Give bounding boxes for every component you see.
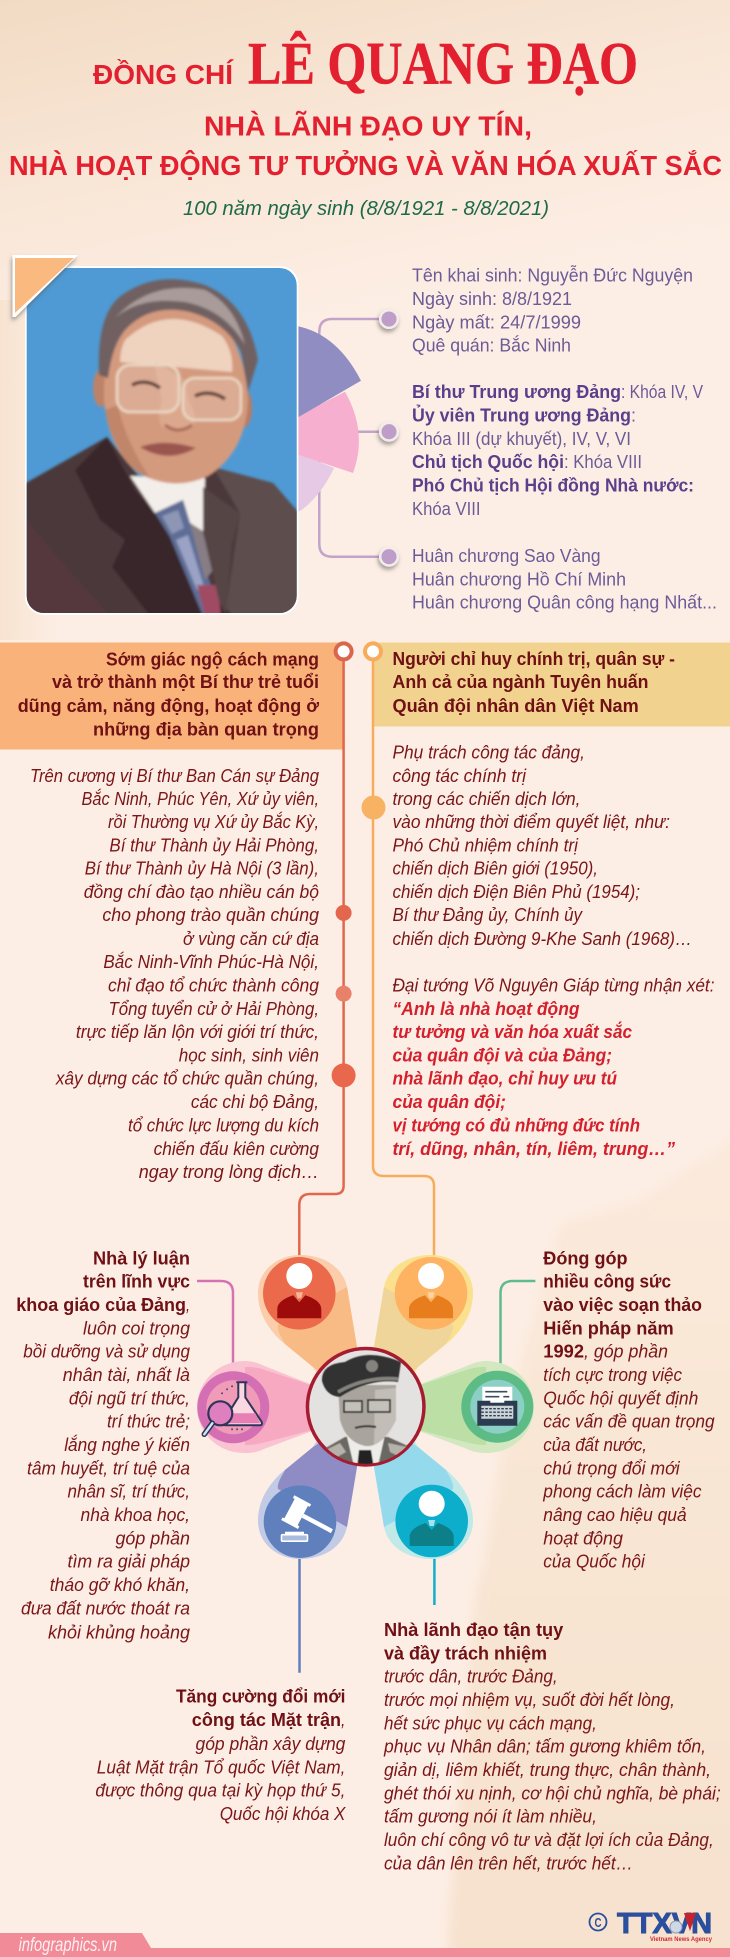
text: dedicated leader: phục vụ Nhân dân; tấm gương khiêm tốn, — [383, 1736, 706, 1757]
top ring — [365, 643, 381, 659]
positions held: Khóa VIII — [412, 498, 480, 519]
text: science and education — [16, 1247, 191, 1642]
personal details: Quê quán: Bắc Ninh — [412, 334, 571, 356]
quotation: của quân đội và của Đảng; — [392, 1044, 612, 1065]
body text: right: Đại tướng Võ Nguyên Giáp từng nhận xét: — [392, 974, 714, 995]
quotation: của quân đội; — [392, 1091, 506, 1112]
agency subtitle: Vietnam News Agency — [650, 1936, 713, 1943]
heading: left — [18, 649, 320, 739]
personal details: Tên khai sinh: Nguyễn Đức Nguyện — [412, 265, 693, 286]
decorations: Huân chương Hồ Chí Minh — [412, 568, 626, 589]
body text: right: trong các chiến dịch lớn, — [392, 788, 580, 809]
positions held: Chủ tịch Quốc hội — [412, 451, 564, 472]
body text: right: vào những thời điểm quyết liệt, như: — [392, 811, 670, 832]
text: dedicated leader: trước dân, trước Đảng, — [384, 1666, 558, 1687]
text: constitution: nâng cao hiệu quả — [543, 1504, 687, 1525]
text: front work: , — [341, 1709, 345, 1730]
body text: left: chiến đấu kiên cường — [154, 1138, 320, 1159]
portrait photo — [12, 255, 299, 616]
body text: left: Bí thư Thành ủy Hà Nội (3 lần), — [85, 858, 319, 879]
text: science and education: nhân sĩ, trí thức, — [68, 1481, 190, 1502]
text: dedicated leader — [383, 1619, 721, 1873]
center portrait — [306, 1347, 426, 1470]
text: dedicated leader: hết sức phục vụ cách mạng, — [384, 1712, 597, 1733]
timeline: right — [362, 643, 434, 1260]
body text: left: Bí thư Thành ủy Hải Phòng, — [109, 834, 319, 855]
text: science and education: khoa giáo của Đảng — [16, 1294, 186, 1315]
quotation: nhà lãnh đạo, chỉ huy ưu tú — [392, 1068, 617, 1089]
text: constitution: tích cực trong việc — [543, 1364, 683, 1385]
petal: bottom right — [366, 1414, 473, 1559]
connector dots — [380, 310, 398, 566]
text: science and education: lắng nghe ý kiến — [64, 1434, 190, 1455]
logo: TTXVN — [590, 1908, 713, 1943]
petal: left — [197, 1361, 320, 1453]
connector: green — [500, 1281, 535, 1372]
text: front work: được thông qua tại kỳ họp thứ 5, — [95, 1780, 345, 1801]
subtitle line 1: NHÀ LÃNH ĐẠO UY TÍN, — [204, 110, 532, 142]
body text: right: chiến dịch Biên giới (1950), — [392, 858, 598, 879]
text: constitution: các vấn đề quan trọng — [543, 1411, 715, 1432]
text: front work: Luật Mặt trận Tổ quốc Việt Nam, — [97, 1756, 345, 1777]
text: constitution: , góp phần — [584, 1341, 668, 1362]
text: front work: Quốc hội khóa X — [220, 1803, 346, 1824]
text: front work: công tác Mặt trận — [192, 1709, 341, 1730]
heading: left: dũng cảm, năng động, hoạt động ở — [18, 695, 320, 716]
connector lines: biography — [319, 319, 389, 557]
text: science and education: góp phần — [116, 1527, 190, 1548]
positions held: : — [631, 404, 636, 425]
timeline dot 1 — [336, 905, 352, 921]
heading: right: Anh cả của ngành Tuyên huấn — [392, 671, 648, 692]
positions held: Phó Chủ tịch Hội đồng Nhà nước: — [412, 474, 694, 496]
petal: top left — [258, 1255, 365, 1400]
connector: blue — [298, 1555, 301, 1673]
body text: left: xây dựng các tổ chức quần chúng, — [55, 1068, 319, 1089]
text: science and education: bồi dưỡng và sử dụng — [23, 1341, 191, 1362]
body text: left: cho phong trào quần chúng — [102, 904, 320, 925]
text: dedicated leader: tấm gương nói ít làm nhiều, — [384, 1806, 597, 1827]
positions held — [412, 381, 704, 519]
decorations — [412, 545, 717, 613]
personal details: Ngày sinh: 8/8/1921 — [412, 288, 572, 309]
copyright mark: C — [594, 1915, 602, 1930]
right column — [392, 648, 714, 1159]
body text: left — [30, 765, 320, 1182]
body text: right: Phó Chủ nhiệm chính trị — [392, 834, 579, 855]
text: constitution: của Quốc hội — [543, 1551, 646, 1572]
text: constitution: Quốc hội quyết định — [543, 1387, 698, 1408]
heading: left: những địa bàn quan trọng — [93, 718, 319, 739]
personal details — [412, 265, 693, 356]
text: science and education: Nhà lý luận — [93, 1247, 190, 1268]
text: science and education: tìm ra giải pháp — [68, 1551, 190, 1572]
body text: left: Bắc Ninh-Vĩnh Phúc-Hà Nội, — [103, 951, 319, 972]
name: LÊ QUANG ĐẠO — [248, 30, 638, 96]
text: constitution: chú trọng đổi mới — [543, 1457, 681, 1478]
corner triangle — [12, 255, 78, 317]
petal: pink — [290, 392, 359, 473]
text: science and education: đội ngũ trí thức, — [69, 1387, 190, 1408]
body text: left: Bắc Ninh, Phúc Yên, Xứ ủy viên, — [82, 788, 319, 809]
positions held: Bí thư Trung ương Đảng — [412, 381, 621, 402]
icon: typewriter — [461, 1371, 533, 1443]
icon: person, teal — [395, 1485, 468, 1557]
text: constitution — [542, 1247, 715, 1572]
petal: purple — [290, 325, 361, 422]
text: science and education: trên lĩnh vực — [83, 1271, 190, 1292]
quotation: “Anh là nhà hoạt động — [392, 998, 580, 1019]
body text: left: Tổng tuyển cử ở Hải Phòng, — [108, 998, 319, 1019]
body text: right: Phụ trách công tác đảng, — [392, 742, 585, 763]
heading: left: Sớm giác ngộ cách mạng — [106, 649, 319, 670]
body text: left: các chi bộ Đảng, — [191, 1091, 319, 1112]
body text: left: học sinh, sinh viên — [179, 1044, 319, 1065]
timeline dot — [362, 796, 386, 820]
text: constitution: Đóng góp — [543, 1247, 628, 1268]
positions held: : Khóa VIII — [564, 451, 642, 472]
heading: left: và trở thành một Bí thư trẻ tuổi — [52, 671, 319, 692]
body text: right: Bí thư Đảng ủy, Chính ủy — [392, 904, 584, 925]
text: science and education: khỏi khủng hoảng — [48, 1621, 191, 1642]
text: dedicated leader: của dân lên trên hết, trước hết… — [384, 1852, 633, 1873]
timeline dot 3 — [332, 1063, 356, 1087]
petal: top right — [366, 1255, 473, 1400]
positions held: Khóa III (dự khuyết), IV, V, VI — [412, 428, 631, 449]
quotation: vị tướng có đủ những đức tính — [392, 1114, 640, 1135]
header band: left column — [0, 642, 344, 750]
heading: right: Quân đội nhân dân Việt Nam — [392, 695, 639, 716]
text: constitution: của đất nước, — [543, 1434, 647, 1455]
text: science and education: nhà khoa học, — [80, 1504, 190, 1525]
footer band — [0, 1933, 730, 1957]
text: front work: góp phần xây dựng — [196, 1733, 346, 1754]
body text: right: chiến dịch Điện Biên Phủ (1954); — [392, 881, 640, 902]
quotation: trí, dũng, nhân, tín, liêm, trung…” — [392, 1138, 676, 1159]
top ring — [336, 643, 352, 659]
text: dedicated leader: Nhà lãnh đạo tận tụy — [384, 1619, 564, 1640]
text: science and education: nhân tài, nhất là — [63, 1364, 190, 1385]
text: science and education: tâm huyết, trí tuệ của — [27, 1457, 190, 1478]
body text: right: công tác chính trị — [392, 765, 527, 786]
text: science and education: , — [186, 1294, 190, 1315]
subtitle line 2: NHÀ HOẠT ĐỘNG TƯ TƯỞNG VÀ VĂN HÓA XUẤT SẮC — [9, 149, 722, 181]
text: dedicated leader: giản dị, liêm khiết, trung thực, chân thành, — [384, 1759, 711, 1780]
heading: right — [392, 648, 675, 716]
fan petals beside portrait — [290, 325, 361, 515]
globe — [670, 1913, 696, 1933]
icon: gavel — [264, 1485, 338, 1558]
title — [9, 30, 722, 220]
text: dedicated leader: trước mọi nhiệm vụ, suốt đời hết lòng, — [384, 1689, 675, 1710]
decorations: Huân chương Sao Vàng — [412, 545, 600, 566]
icon: person, red — [263, 1257, 336, 1330]
timeline: left — [299, 643, 356, 1260]
agency name: TTXVN — [617, 1908, 712, 1940]
personal details: Ngày mất: 24/7/1999 — [412, 311, 581, 332]
body text: left: trực tiếp lăn lộn với giới trí thức, — [76, 1021, 319, 1042]
body text: right — [392, 742, 714, 995]
timeline dot 2 — [336, 986, 352, 1002]
body text: right: chiến dịch Đường 9-Khe Sanh (1968)… — [392, 928, 692, 949]
footer site name: infographics.vn — [19, 1934, 117, 1956]
text: science and education: trí thức trẻ; — [107, 1411, 190, 1432]
left column — [18, 649, 320, 1182]
body text: left: ngay trong lòng địch… — [139, 1161, 319, 1182]
text: front work: Tăng cường đổi mới — [176, 1686, 345, 1707]
photo frame — [25, 266, 298, 615]
text: constitution: vào việc soạn thảo — [543, 1294, 702, 1315]
positions held: Ủy viên Trung ương Đảng — [412, 404, 631, 425]
body text: left: tổ chức lực lượng du kích — [128, 1114, 319, 1135]
text: dedicated leader: và đầy trách nhiệm — [384, 1642, 547, 1663]
quotation: tư tưởng và văn hóa xuất sắc — [392, 1021, 633, 1042]
icon: flask and magnifier — [197, 1371, 269, 1443]
title prefix: ĐỒNG CHÍ — [93, 59, 234, 90]
text: constitution: phong cách làm việc — [542, 1481, 702, 1502]
anniversary dates: 100 năm ngày sinh (8/8/1921 - 8/8/2021) — [183, 198, 549, 220]
text: science and education: luôn coi trọng — [83, 1317, 191, 1338]
positions held: : Khóa IV, V — [621, 381, 704, 402]
heading: right: Người chỉ huy chính trị, quân sự - — [392, 648, 675, 669]
petal: right — [411, 1361, 534, 1453]
body text: left: ở vùng căn cứ địa — [183, 928, 319, 949]
text: constitution: 1992 — [543, 1341, 584, 1362]
petal: light lilac — [290, 450, 334, 515]
connector: pink — [197, 1281, 233, 1372]
text: constitution: nhiều công sức — [543, 1271, 671, 1292]
text: constitution: hoạt động — [543, 1527, 624, 1548]
text: front work — [95, 1686, 346, 1824]
biography text — [412, 265, 717, 613]
body text: left: chỉ đạo tổ chức thành công — [108, 974, 320, 995]
body text: left: đồng chí đào tạo nhiều cán bộ — [84, 881, 319, 902]
petal: bottom left — [258, 1414, 365, 1559]
decorations: Huân chương Quân công hạng Nhất... — [412, 592, 717, 613]
text: dedicated leader: luôn chí công vô tư và đặt lợi ích của Đảng, — [384, 1829, 714, 1850]
flower diagram — [197, 1255, 534, 1559]
text: constitution: Hiến pháp năm — [543, 1317, 674, 1338]
text: science and education: tháo gỡ khó khăn, — [50, 1574, 190, 1595]
body text: left: Trên cương vị Bí thư Ban Cán sự Đảng — [30, 765, 320, 786]
connector: teal — [433, 1555, 436, 1605]
quotation — [392, 998, 676, 1159]
body text: left: rồi Thường vụ Xứ ủy Bắc Kỳ, — [108, 811, 319, 832]
text: science and education: đưa đất nước thoát ra — [21, 1597, 190, 1618]
icon: person, orange — [395, 1257, 467, 1330]
header band: right column — [374, 642, 730, 726]
